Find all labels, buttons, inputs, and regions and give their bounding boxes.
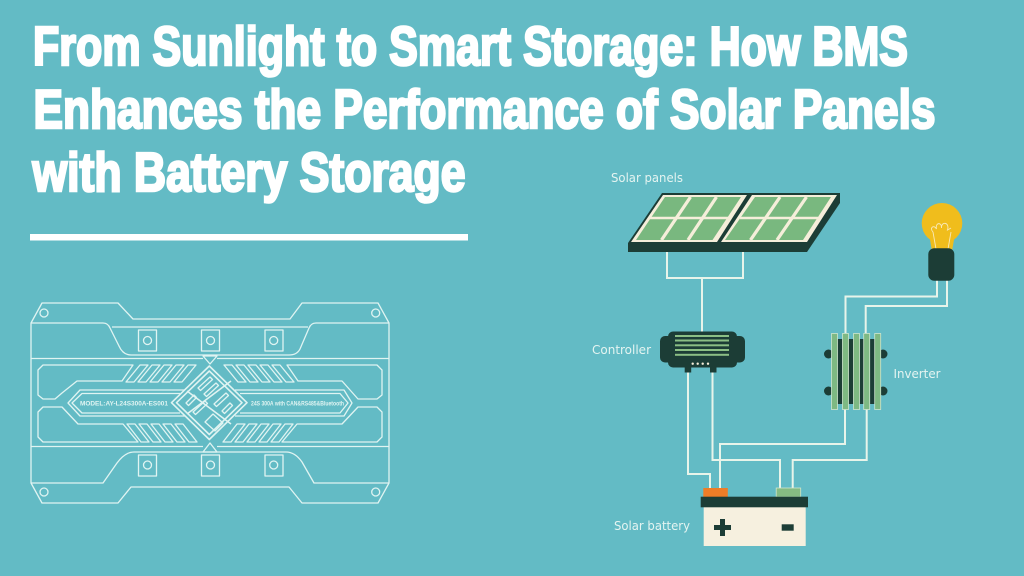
label: solar battery: Solar battery — [614, 519, 690, 533]
mounting squares — [138, 330, 283, 476]
plus sign — [714, 519, 731, 536]
BMS device outline — [31, 303, 389, 503]
inverter icon — [824, 334, 888, 410]
controller icon — [660, 332, 745, 372]
BMS spec text: 24S 300A with CAN&RS485&Bluetooth — [251, 400, 344, 408]
light bulb icon — [922, 203, 962, 281]
corner screw holes — [40, 309, 380, 496]
label: inverter: Inverter — [894, 367, 941, 381]
wiring — [667, 252, 947, 489]
hatching — [126, 365, 294, 442]
BMS model text: MODEL:AY-L24S300A-ES001 — [80, 400, 168, 408]
minus sign — [782, 524, 794, 531]
device casing — [31, 303, 389, 503]
solar panels icon — [628, 193, 840, 252]
side panels — [38, 365, 382, 442]
label: controller: Controller — [592, 343, 651, 357]
title underline — [30, 234, 468, 240]
title — [32, 15, 936, 203]
triangles — [203, 356, 217, 452]
title: with Battery Storage — [32, 141, 465, 203]
central diamond — [172, 366, 247, 440]
central label bars — [68, 390, 352, 416]
label: solar panels: Solar panels — [611, 171, 683, 185]
solar battery icon — [701, 488, 808, 546]
